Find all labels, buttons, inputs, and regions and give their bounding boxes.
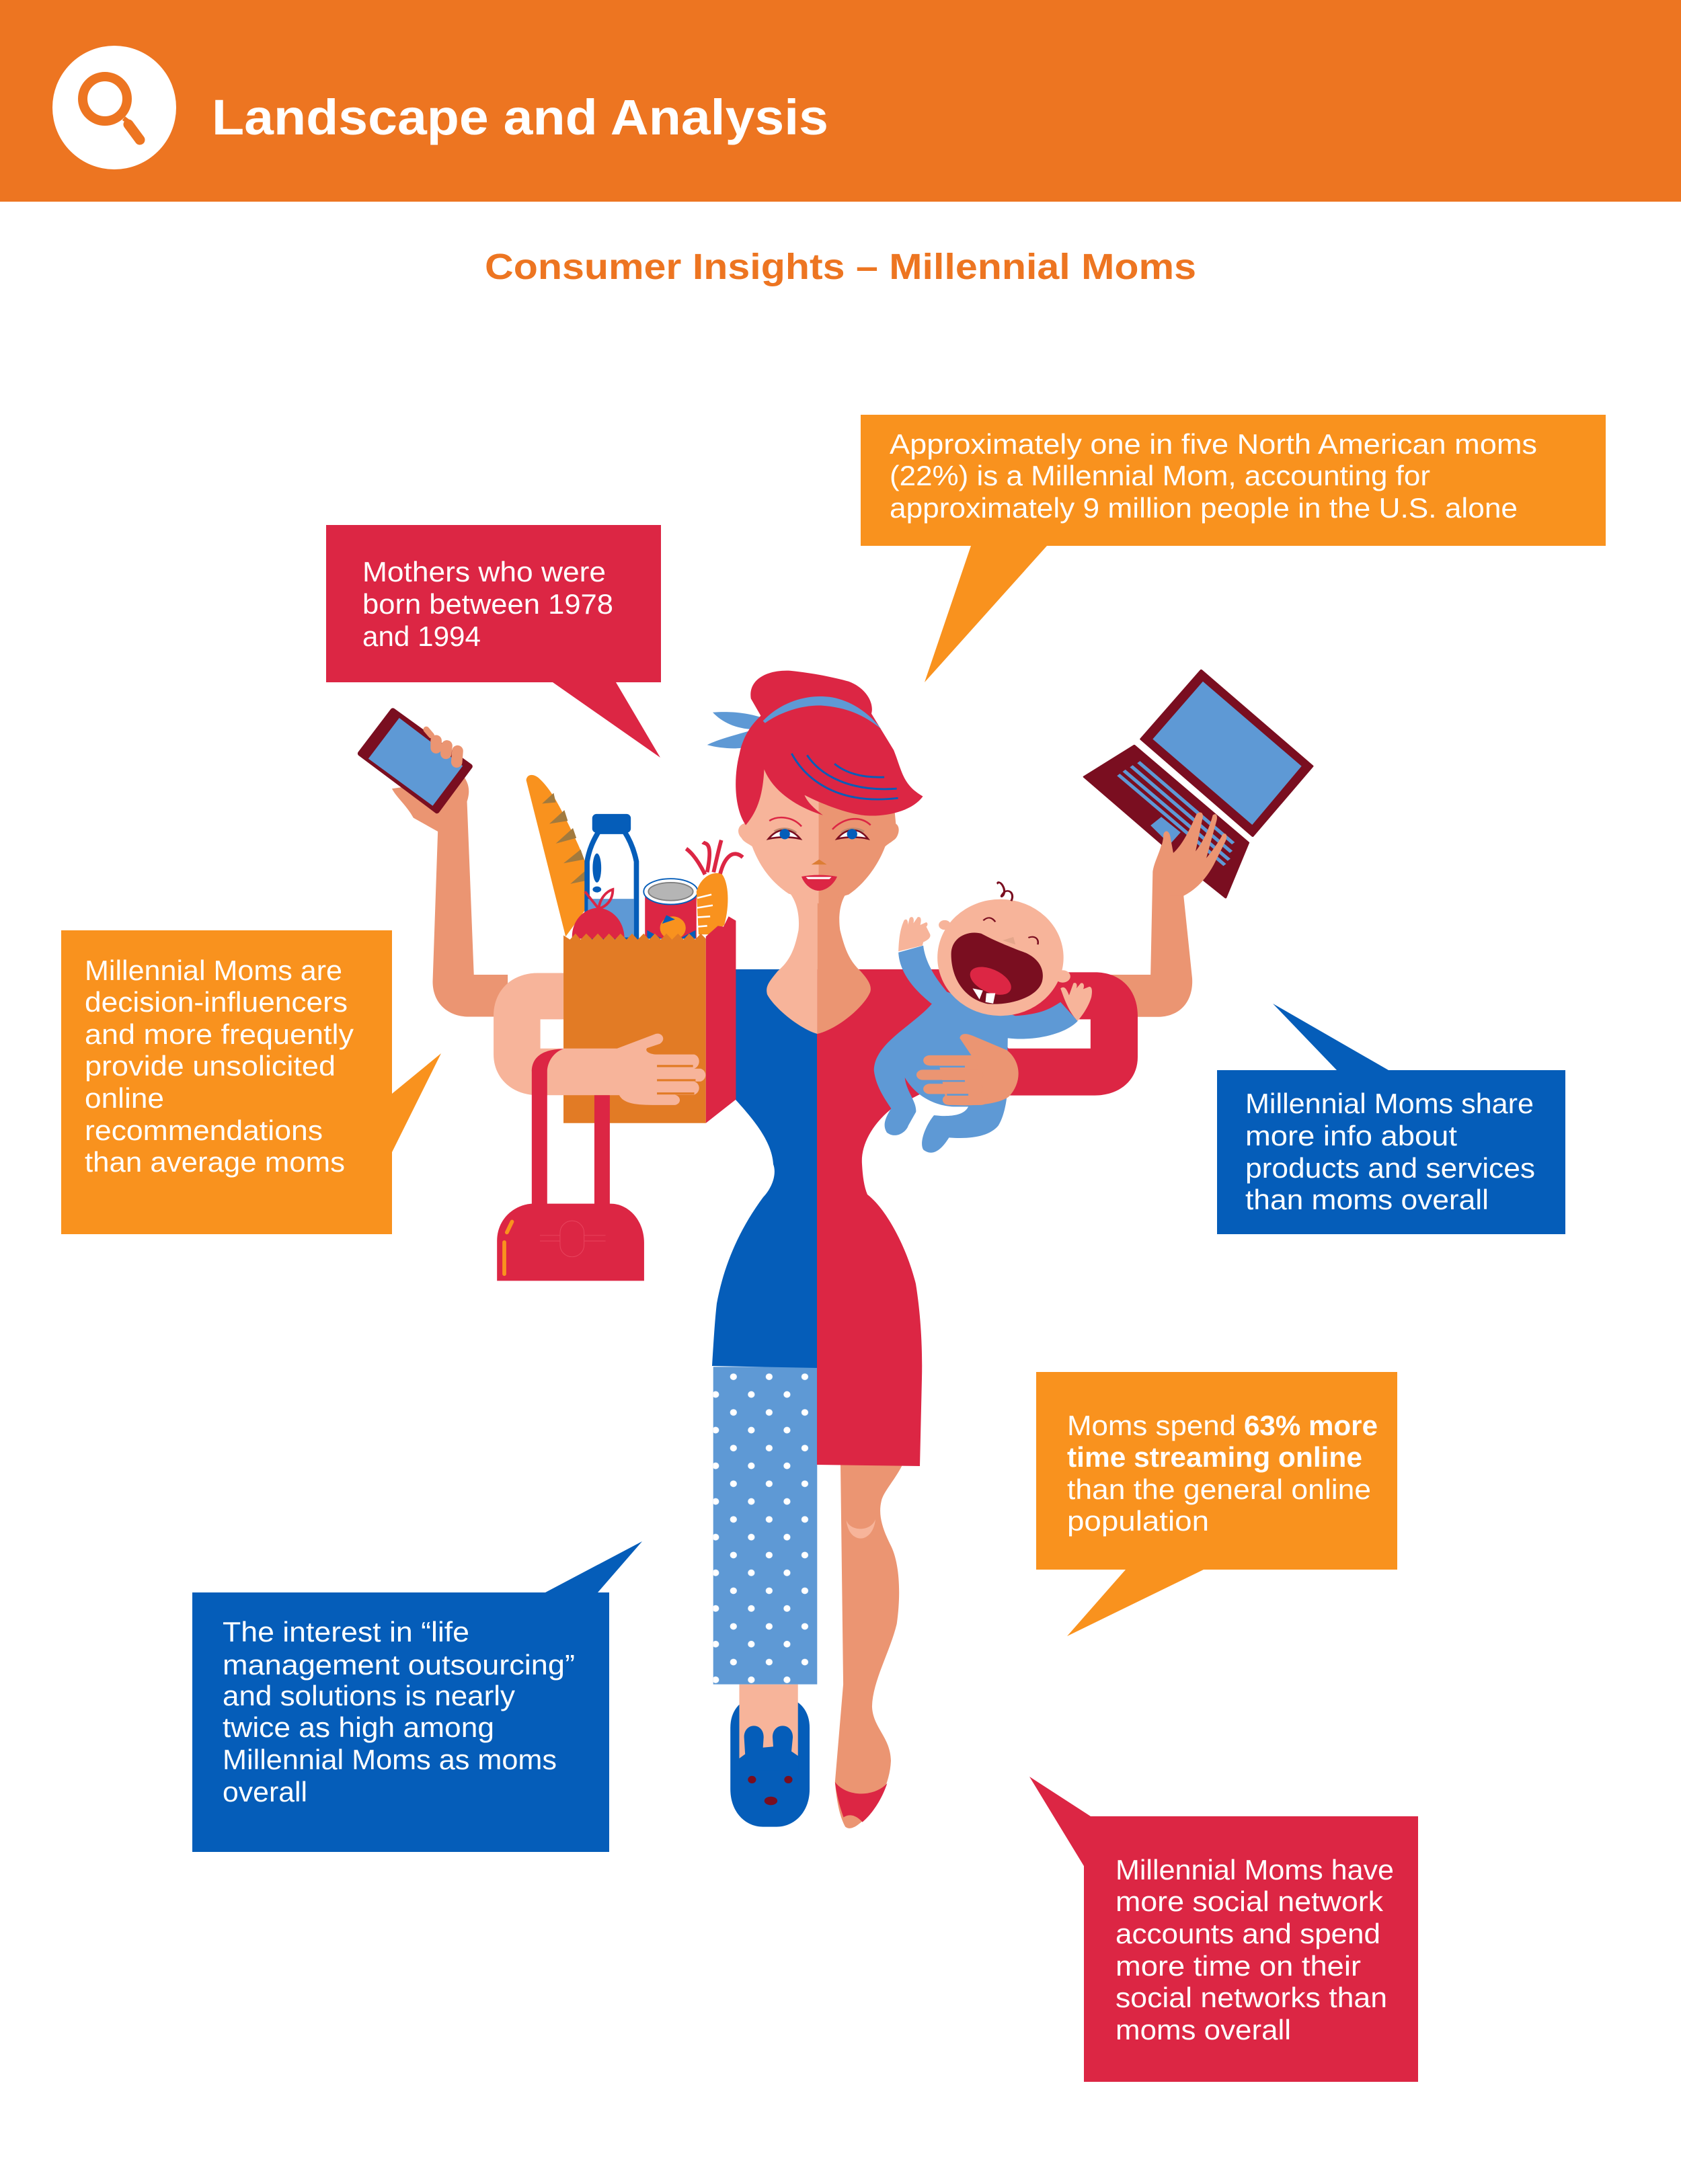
callout: life management outsourcing: and solutions is nearly <box>223 1680 515 1711</box>
callout: one in five moms: Approximately one in five North American moms <box>890 428 1537 460</box>
callout: decision-influencers: recommendations <box>85 1115 323 1146</box>
callout: life management outsourcing: twice as high among <box>223 1711 494 1743</box>
callout: share more info: products and services <box>1245 1152 1535 1184</box>
callout: decision-influencers: Millennial Moms are <box>85 955 342 986</box>
callout: life management outsourcing: management outsourcing” <box>223 1649 575 1681</box>
laptop <box>1084 670 1313 897</box>
callout: one in five moms: (22%) is a Millennial Mom, accounting for <box>890 460 1430 491</box>
callout: one in five moms <box>861 415 1606 682</box>
red sleeve <box>930 972 1138 1096</box>
callout: life management outsourcing: Millennial Moms as moms <box>223 1744 557 1775</box>
callout: share more info: than moms overall <box>1245 1184 1489 1215</box>
paper bag and hand <box>494 916 736 1123</box>
callout: life management outsourcing: overall <box>223 1776 307 1808</box>
callout: life management outsourcing: The interest in “life <box>223 1616 469 1648</box>
callout: share more info: more info about <box>1245 1120 1457 1151</box>
callout: decision-influencers <box>61 930 441 1234</box>
callout: decision-influencers: decision-influencers <box>85 986 348 1018</box>
callout: social network accounts: moms overall <box>1116 2014 1291 2046</box>
baby <box>874 883 1092 1153</box>
callout: streaming online: Moms spend <box>1067 1410 1236 1441</box>
subtitle: Consumer Insights – Millennial Moms <box>485 247 1196 287</box>
groceries: baguette, bottle, can, carrot, apple <box>526 775 743 940</box>
arm sleeve skin <box>494 973 705 1105</box>
arm with laptop <box>1101 813 1228 1017</box>
icon: smartphone <box>360 711 470 811</box>
raised arm holding phone <box>360 711 508 1017</box>
callout: life management outsourcing <box>192 1541 642 1852</box>
callout: decision-influencers: and more frequently <box>85 1018 354 1050</box>
handbag <box>497 1049 644 1281</box>
callout: decision-influencers: than average moms <box>85 1146 345 1178</box>
illustration: multitasking mom <box>360 670 1313 1828</box>
callout: social network accounts: more time on their <box>1116 1950 1361 1982</box>
legs and slippers <box>713 1367 903 1828</box>
callout: streaming online: 63% more <box>1244 1410 1378 1441</box>
callout: born between 1978 and 1994: born between 1978 <box>362 588 613 620</box>
hair and bandana <box>707 671 923 825</box>
callout: share more info <box>1217 1004 1565 1234</box>
callout: decision-influencers: provide unsolicited <box>85 1050 336 1082</box>
callout: social network accounts: accounts and spend <box>1116 1918 1380 1949</box>
title: Landscape and Analysis <box>212 89 828 145</box>
callout: streaming online: population <box>1067 1505 1209 1537</box>
callout: social network accounts: more social network <box>1116 1886 1384 1917</box>
callout: streaming online: than the general online <box>1067 1473 1371 1505</box>
neck and face <box>738 763 899 1034</box>
arm holding baby <box>923 1034 1019 1105</box>
header banner <box>0 0 1681 202</box>
callout: social network accounts <box>1029 1777 1418 2082</box>
icon: magnifying glass <box>52 46 176 169</box>
callout: born between 1978 and 1994: Mothers who were <box>362 556 606 588</box>
callout: streaming online <box>1036 1372 1397 1636</box>
callout: share more info: Millennial Moms share <box>1245 1088 1534 1119</box>
callout: born between 1978 and 1994: and 1994 <box>362 620 481 652</box>
callout: born between 1978 and 1994 <box>326 525 661 758</box>
callout: decision-influencers: online <box>85 1082 164 1114</box>
dress <box>712 969 1009 1466</box>
callout: social network accounts: social networks than <box>1116 1982 1387 2013</box>
callout: streaming online: time streaming online <box>1067 1441 1362 1473</box>
callout: one in five moms: approximately 9 million people in the U.S. alone <box>890 492 1518 524</box>
callout: social network accounts: Millennial Moms have <box>1116 1854 1394 1886</box>
